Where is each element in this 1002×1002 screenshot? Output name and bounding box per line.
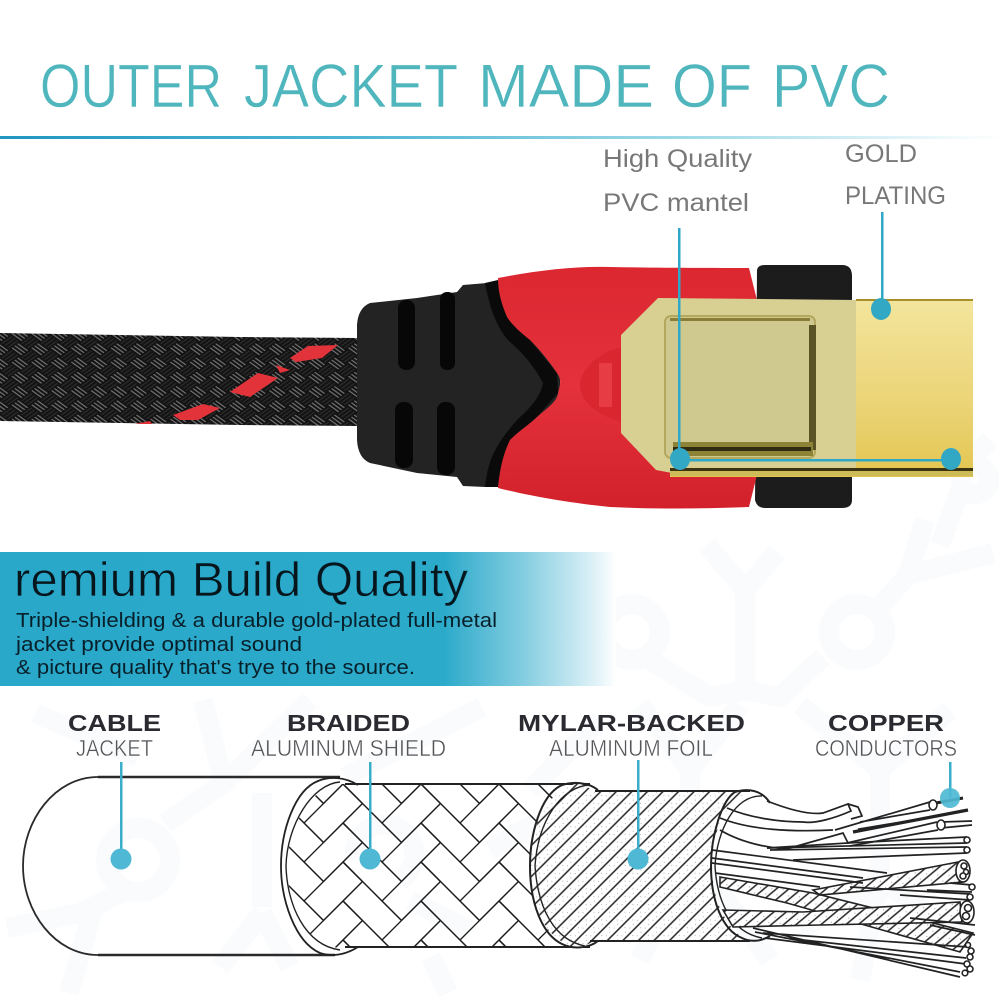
title: OF — [672, 52, 752, 120]
shield recess — [665, 316, 815, 458]
plate lower edge — [670, 468, 973, 471]
label: mylar-backed aluminum foil — [518, 710, 745, 761]
title rule — [0, 136, 1002, 139]
label: mylar-backed aluminum foil: ALUMINUM FOIL — [549, 735, 713, 761]
label: braided aluminum shield: ALUMINUM SHIELD — [251, 735, 446, 761]
pointer: foil — [628, 760, 648, 870]
label: copper conductors — [815, 710, 957, 761]
back shell — [755, 265, 852, 508]
diagram: cable cross-section — [23, 777, 975, 977]
red housing — [498, 267, 757, 508]
pointer: cable jacket — [110, 762, 132, 870]
banner body text — [15, 610, 497, 679]
label: cable jacket — [68, 710, 161, 761]
label: cable jacket: JACKET — [76, 735, 153, 761]
photo: HDMI connector — [357, 265, 973, 508]
banner body text: jacket provide optimal sound — [15, 634, 302, 656]
boot dark band — [485, 280, 558, 487]
conductor end circles — [929, 800, 975, 976]
callout labels: high quality PVC mantel: High Quality — [603, 145, 753, 173]
photo: braided cable — [0, 333, 357, 426]
conductor wires — [712, 798, 975, 977]
red tracer strand — [135, 345, 338, 424]
callout: PVC mantel pointer — [670, 228, 961, 470]
outer jacket — [23, 777, 358, 955]
title: JACKET — [244, 52, 458, 120]
label: braided aluminum shield: BRAIDED — [287, 710, 410, 736]
braided shield layer — [285, 784, 600, 948]
label: cable jacket: CABLE — [68, 710, 161, 736]
banner body text: Triple-shielding & a durable gold-plated full-metal — [16, 610, 497, 632]
background watermark: network pattern — [7, 440, 993, 993]
translucent metal shield — [621, 298, 856, 473]
label: mylar-backed aluminum foil: MYLAR-BACKED — [518, 710, 745, 736]
callout labels: high quality PVC mantel: PVC mantel — [603, 189, 749, 217]
pointer: copper conductors — [940, 762, 960, 808]
label: braided aluminum shield — [251, 710, 446, 761]
banner: premium build quality — [0, 552, 616, 686]
gold plate — [670, 300, 973, 477]
callout labels: gold plating: PLATING — [845, 182, 946, 210]
strain relief boot — [357, 283, 560, 487]
hatched conductor bundles — [720, 862, 973, 952]
callout labels: gold plating — [845, 140, 946, 210]
callout: gold plating pointer — [871, 212, 891, 320]
foil layer — [530, 783, 770, 948]
callout labels: gold plating: GOLD — [845, 140, 917, 168]
housing logo bump — [580, 347, 622, 422]
callout labels: high quality PVC mantel — [603, 145, 753, 217]
title: OUTER — [40, 52, 222, 120]
title: PVC — [772, 52, 890, 120]
title: MADE — [478, 52, 654, 120]
label: copper conductors: COPPER — [828, 710, 944, 736]
pointer: braided shield — [360, 762, 380, 870]
banner heading: remium Build Quality — [14, 554, 468, 607]
banner body text: & picture quality that's trye to the source. — [16, 657, 415, 679]
title — [40, 52, 890, 120]
boot slots — [395, 292, 455, 475]
label: copper conductors: CONDUCTORS — [815, 735, 957, 761]
